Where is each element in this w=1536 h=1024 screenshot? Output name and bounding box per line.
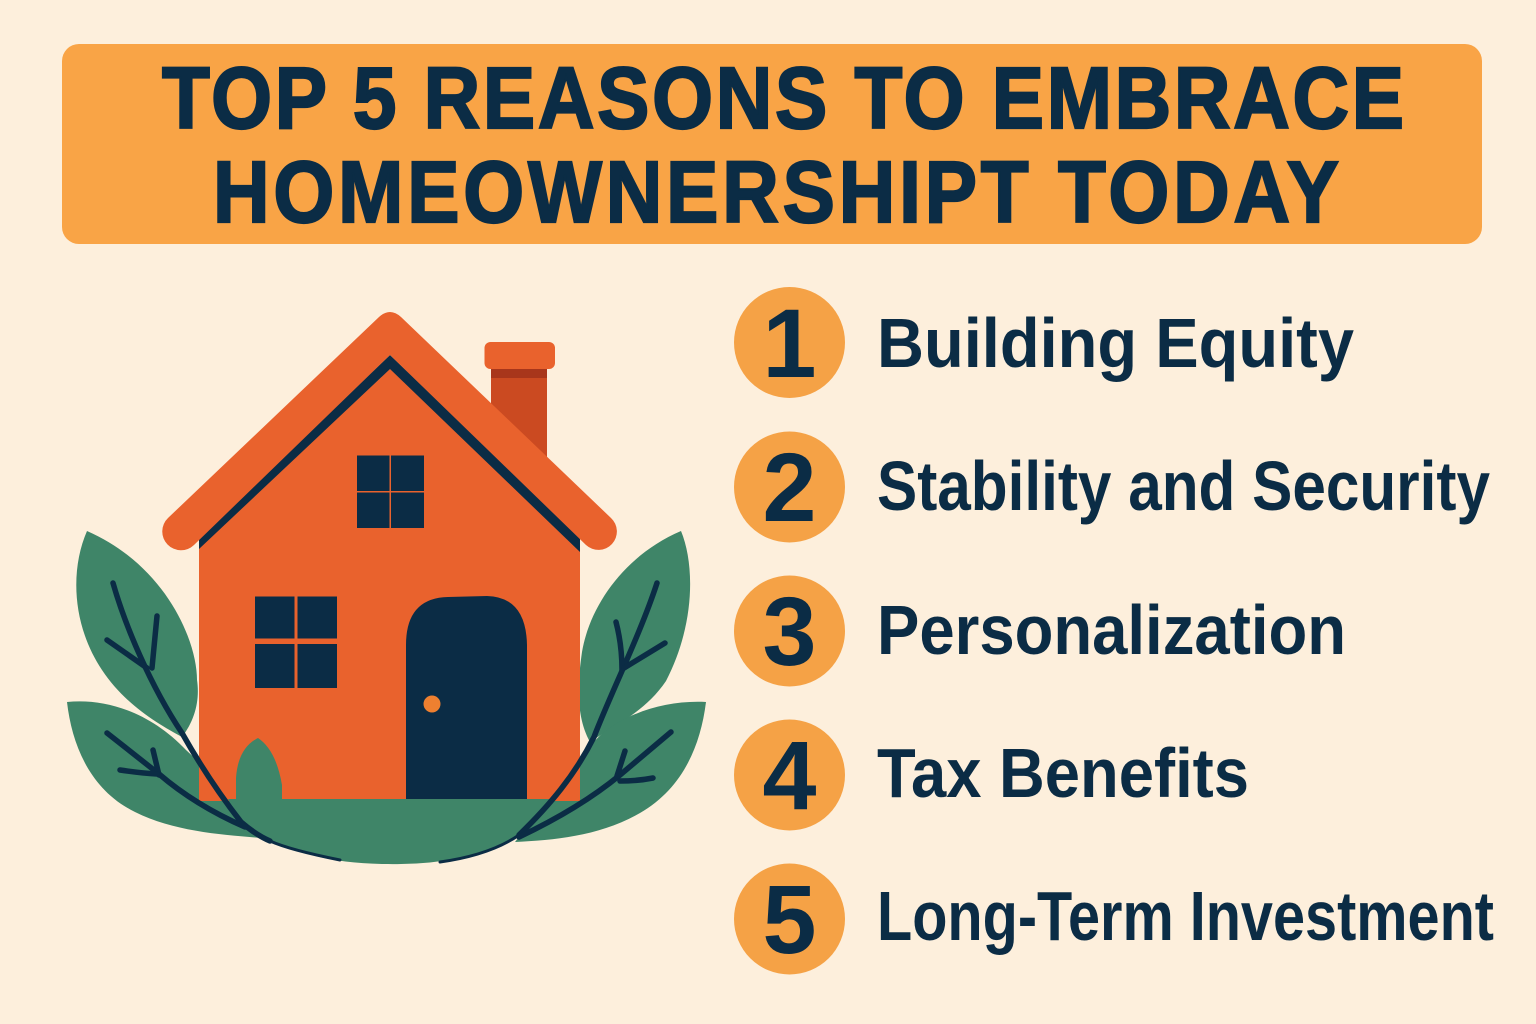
right stems: [440, 583, 671, 862]
title line 1: TOP 5 REASONS TO EMBRACE: [162, 49, 1404, 147]
reason 4: [734, 720, 1249, 830]
leaf: lower left: [67, 701, 262, 838]
badge 2: [734, 432, 845, 542]
reason 3: [734, 576, 1346, 686]
numeral 3: 3: [763, 577, 816, 686]
numeral 2: 2: [763, 433, 816, 542]
door: [406, 596, 527, 800]
roof: [162, 312, 617, 550]
upper window: [357, 456, 424, 528]
label: building equity: Building Equity: [877, 304, 1354, 382]
reason 2: [734, 432, 1490, 542]
reason 1: [734, 287, 1354, 398]
badge 3: [734, 576, 845, 686]
leaf: upper left: [76, 531, 198, 737]
badge 5: [734, 864, 845, 974]
title line 2: HOMEOWNERSHIPT TODAY: [213, 143, 1339, 241]
numeral 4: 4: [763, 721, 817, 830]
door knob: [424, 696, 440, 712]
roof fascia: [199, 355, 580, 552]
title banner: [62, 44, 1482, 244]
badge 4: [734, 720, 845, 830]
leaf: upper right: [579, 531, 690, 742]
chimney: [484, 342, 555, 458]
shrub: [236, 738, 282, 805]
house wall: [199, 362, 580, 801]
label: personalization: Personalization: [877, 591, 1346, 669]
lower window: [255, 596, 337, 688]
house illustration: [67, 312, 706, 864]
reason 5: [734, 864, 1494, 974]
ground mound: [228, 799, 552, 864]
numeral 5: 5: [763, 865, 816, 974]
left stems: [107, 583, 340, 860]
label: tax benefits: Tax Benefits: [877, 734, 1249, 812]
numeral 1: 1: [763, 289, 816, 398]
badge 1: [734, 287, 845, 398]
leaf: lower right: [515, 702, 706, 842]
